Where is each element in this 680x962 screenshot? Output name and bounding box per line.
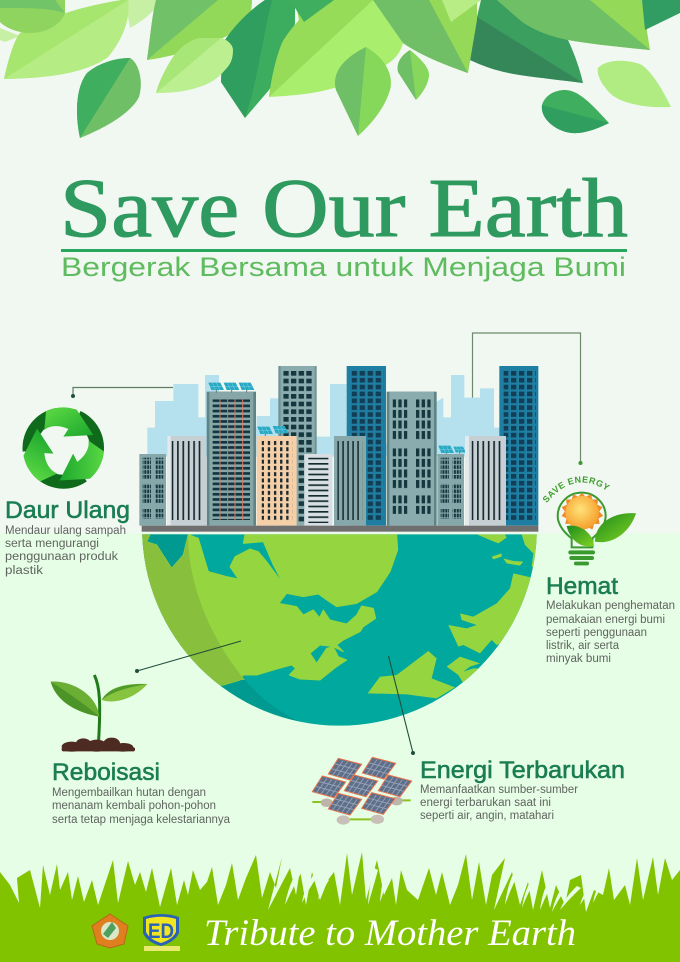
leader line: reboisasi [135, 641, 241, 673]
text: hemat: minyak bumi [546, 653, 611, 665]
main continent [130, 534, 398, 685]
earth globe [142, 534, 537, 726]
text: hemat: pemakaian energi bumi [546, 614, 665, 626]
tall tower behind [278, 366, 317, 526]
building: small left [139, 454, 166, 526]
text: reboisasi: Reboisasi [52, 759, 160, 786]
blue tower right [499, 366, 538, 526]
text: energi terbarukan: seperti air, angin, matahari [420, 810, 554, 822]
subtitle: Bergerak Bersama untuk Menjaga Bumi [61, 252, 626, 282]
building: small right [437, 446, 466, 526]
dark ocean edge [142, 534, 299, 722]
text: reboisasi: Mengembailkan hutan dengan [52, 787, 206, 799]
city skyline [139, 366, 538, 532]
building: red lined tower [207, 383, 256, 526]
building: grey stripes right [465, 436, 506, 526]
text: daur ulang: Mendaur ulang sampah [5, 525, 126, 537]
text: energi terbarukan [420, 757, 625, 822]
logo: orange crest [92, 914, 128, 948]
continent shadow [142, 534, 245, 685]
north-east land [477, 534, 537, 567]
tagline: Tribute to Mother Earth [204, 913, 576, 954]
text: daur ulang: Daur Ulang [5, 497, 130, 524]
icon: recycling arrows [13, 407, 118, 503]
text: daur ulang: serta mengurangi [5, 538, 99, 550]
leader line: energi [388, 656, 415, 755]
south-east island [446, 656, 480, 682]
text: daur ulang [5, 497, 130, 577]
icon: sprout [51, 675, 147, 752]
text: hemat [546, 573, 675, 665]
southern land [368, 651, 455, 698]
text: reboisasi [52, 759, 231, 826]
icon: solar panels [312, 757, 412, 825]
connector: recycling [71, 388, 173, 398]
logo: ED shield: ED [148, 920, 174, 943]
building: peach [257, 426, 297, 526]
text: hemat: seperti penggunaan [546, 627, 647, 639]
text: hemat: listrik, air serta [546, 640, 620, 652]
icon: save energy bulb [543, 476, 636, 566]
east land [448, 573, 531, 654]
building: white striped [304, 454, 332, 526]
text: energi terbarukan: Energi Terbarukan [420, 757, 625, 784]
text: daur ulang: penggunaan produk [5, 551, 118, 563]
text: energi terbarukan: energi terbarukan saat ini [420, 797, 551, 809]
text: reboisasi: serta tetap menjaga kelestariannya [52, 814, 231, 826]
text: energi terbarukan: Memanfaatkan sumber-sumber [420, 784, 578, 796]
title rule [61, 249, 627, 252]
building: grey stripes [167, 436, 206, 526]
icon: save energy bulb: SAVE ENERGY [543, 476, 610, 502]
text: hemat: Hemat [546, 573, 618, 600]
text: daur ulang: plastik [5, 565, 43, 577]
building: teal stripes [334, 436, 366, 526]
text: reboisasi: menanam kembali pohon-pohon [52, 800, 216, 812]
connector: save energy [472, 333, 582, 465]
grass footer [0, 852, 680, 962]
title: Save Our Earth [60, 162, 628, 255]
blue tower [347, 366, 386, 526]
background skyline [147, 375, 503, 457]
leaves canopy [0, 0, 680, 138]
text: hemat: Melakukan penghematan [546, 600, 675, 612]
logo: ED shield [143, 914, 180, 951]
ground slab [142, 526, 538, 532]
ocean [142, 534, 537, 726]
building: wide grey [387, 392, 437, 526]
